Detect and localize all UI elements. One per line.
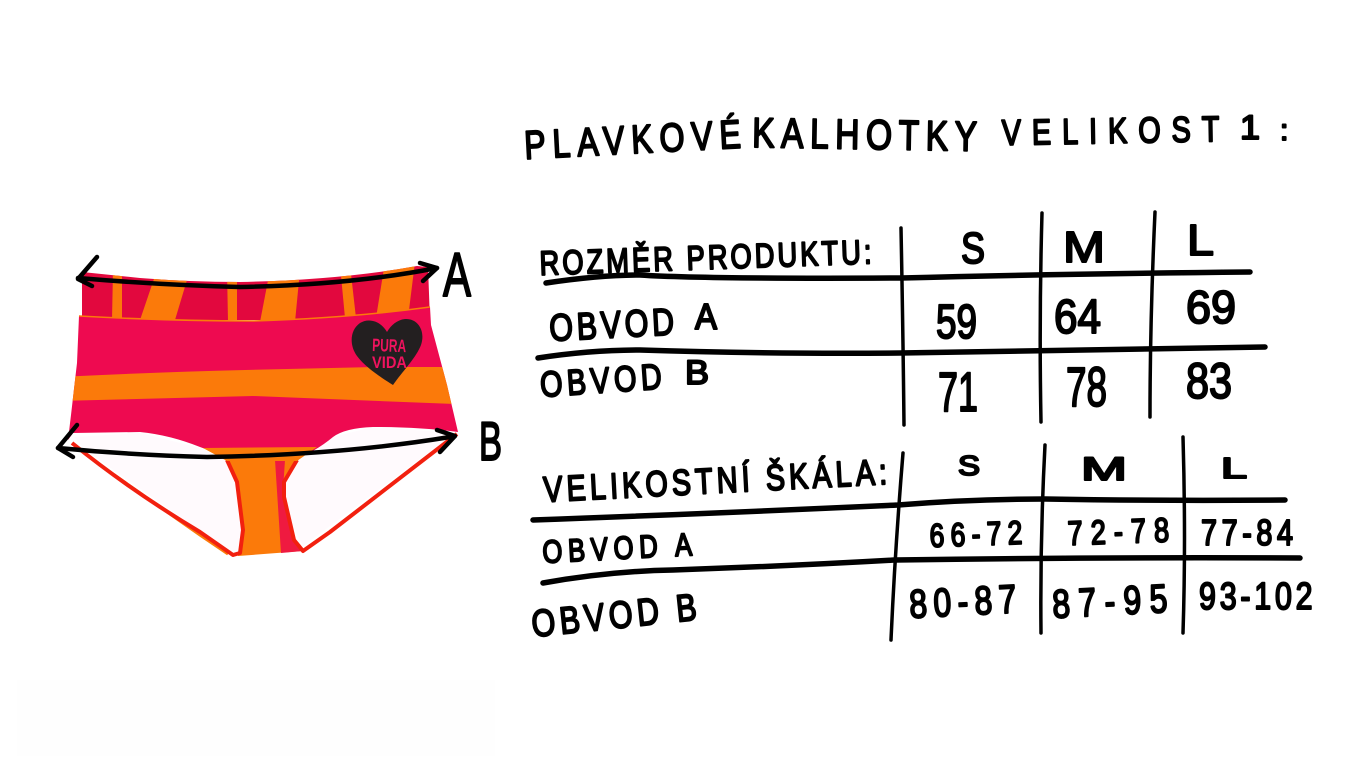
values: 72-78 — [1067, 511, 1170, 553]
values: 77-84 — [1201, 512, 1293, 553]
values: 80-87 — [908, 576, 1018, 627]
size headers — [958, 450, 1247, 487]
row labels: OBVOD B — [530, 587, 699, 646]
label B: B — [479, 410, 502, 472]
label A: A — [443, 241, 471, 310]
heading: size scale: VELIKOSTNÍ ŠKÁLA: — [542, 451, 888, 510]
values — [908, 511, 1313, 627]
table grid — [538, 212, 1265, 425]
values: 93-102 — [1199, 576, 1313, 618]
values: 78 — [1066, 355, 1107, 418]
values: 87-95 — [1051, 576, 1169, 627]
heart logo: Pura Vida: PURA — [372, 335, 407, 356]
infographic canvas — [56, 112, 1312, 642]
back waistband with stripes — [82, 266, 430, 320]
table: size scale — [530, 437, 1313, 646]
title: VELIKOST — [1001, 108, 1220, 153]
title: PLAVKOVÉ — [523, 111, 742, 168]
size headers — [961, 216, 1214, 273]
size headers: M — [1081, 451, 1127, 487]
heart logo: Pura Vida — [352, 319, 422, 385]
size headers: L — [1221, 453, 1247, 485]
front panel — [60, 307, 458, 461]
size headers: M — [1063, 223, 1105, 272]
white lining right — [283, 427, 455, 546]
arrow A — [78, 257, 437, 287]
gusset — [227, 458, 303, 556]
size headers: L — [1187, 216, 1214, 265]
title: : — [1280, 114, 1288, 147]
row labels: A — [695, 296, 717, 337]
right leg edging — [284, 434, 457, 551]
values: 59 — [936, 296, 977, 349]
row labels: OBVOD — [548, 301, 675, 350]
values: 71 — [938, 360, 978, 423]
title: 1 — [1240, 109, 1260, 147]
values: 69 — [1186, 281, 1236, 333]
product photo: swim briefs — [58, 241, 502, 556]
heart logo: Pura Vida: VIDA — [372, 353, 407, 372]
values: 66-72 — [929, 515, 1023, 555]
row labels: OBVOD — [539, 355, 663, 405]
white lining left — [74, 433, 243, 553]
arrow B — [58, 425, 455, 457]
orange sliver under left leg — [100, 465, 228, 554]
values: 83 — [1186, 353, 1232, 409]
row labels: B — [685, 354, 709, 392]
row labels — [530, 528, 699, 646]
size headers: S — [958, 450, 980, 481]
size headers: S — [961, 224, 985, 273]
heading: product size: ROZMĚR PRODUKTU: — [539, 233, 872, 283]
table: product dimensions — [538, 212, 1265, 425]
title — [523, 108, 1288, 168]
leg edging left — [72, 443, 243, 555]
row labels: OBVOD A — [542, 528, 693, 571]
row labels — [539, 296, 717, 405]
values: 64 — [1054, 291, 1101, 344]
table grid — [533, 437, 1300, 640]
title: KALHOTKY — [752, 111, 977, 161]
values — [936, 281, 1236, 423]
